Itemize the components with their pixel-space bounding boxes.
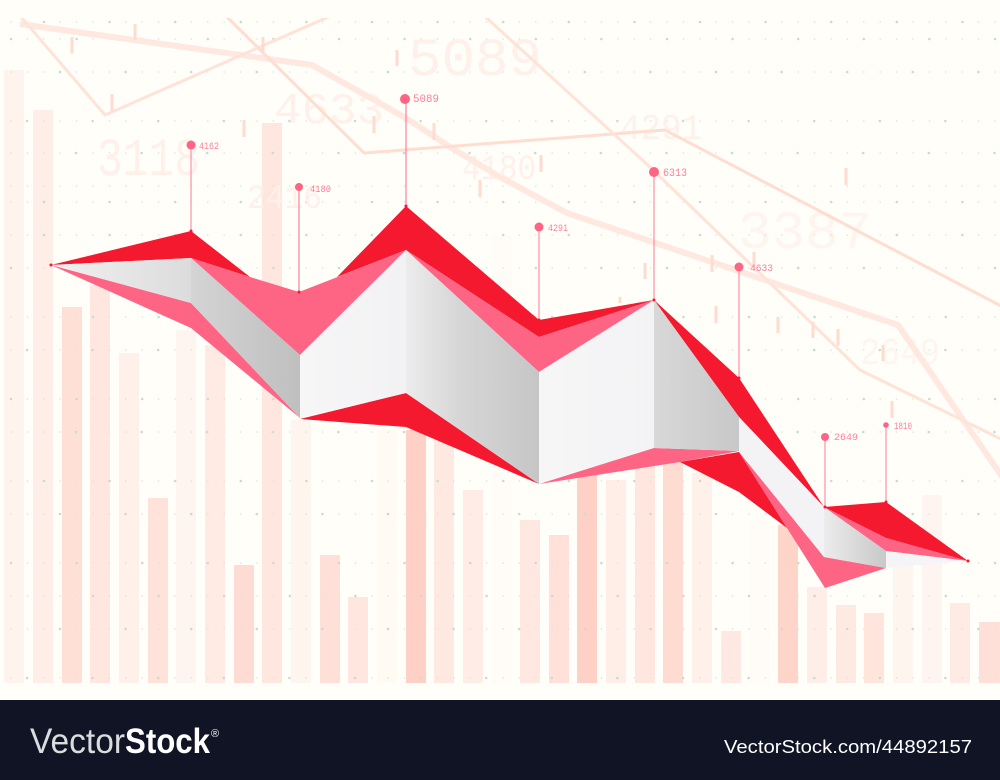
ribbon panels xyxy=(51,250,968,568)
data pin: 1810 xyxy=(883,422,912,504)
ghost numbers: 4291 xyxy=(620,109,702,150)
background bar chart xyxy=(4,70,1000,683)
ghost numbers: 2416 xyxy=(247,181,322,219)
data pin: 2649: 2649 xyxy=(834,433,858,444)
footer logo: Vector xyxy=(30,722,125,761)
footer logo xyxy=(30,722,219,761)
data pin: 6313 xyxy=(649,167,687,302)
red lower fold, centre xyxy=(300,393,539,484)
data pin: 5089 xyxy=(400,94,439,208)
pink upper fold, centre xyxy=(406,250,654,372)
data pin: 4633 xyxy=(734,262,773,380)
data pin: 4633: 4633 xyxy=(750,263,773,275)
data pin: 1810: 1810 xyxy=(894,422,912,433)
red upper fold, far right xyxy=(824,502,968,561)
red upper fold, centre xyxy=(337,206,654,337)
red upper fold, right xyxy=(654,300,824,507)
red upper fold, left xyxy=(51,231,250,277)
background trend lines xyxy=(15,10,1000,478)
red lower fold, right xyxy=(680,452,787,528)
data pin: 2649 xyxy=(821,433,858,508)
ghost numbers: 2649 xyxy=(860,333,940,376)
pink lower fold, centre xyxy=(539,448,739,484)
data pin: 5089: 5089 xyxy=(413,94,439,106)
ghost numbers: 4180 xyxy=(462,150,536,190)
pink upper fold, far right xyxy=(824,507,968,561)
footer logo: ® xyxy=(211,728,219,740)
data pin: 4162 xyxy=(186,140,219,232)
ghost numbers xyxy=(97,31,940,376)
footer image id: VectorStock.com/44892157 xyxy=(724,737,972,757)
ribbon end points xyxy=(50,264,970,562)
ghost numbers: 3118 xyxy=(97,131,200,192)
data pin: 4291: 4291 xyxy=(548,224,568,235)
ghost numbers: 4633 xyxy=(274,87,384,137)
folded ribbon chart xyxy=(51,206,968,588)
footer bar xyxy=(0,700,1000,780)
data pin: 4180: 4180 xyxy=(310,185,331,196)
data pin: 4291 xyxy=(534,222,568,322)
data pin: 4180 xyxy=(295,183,331,294)
data pin: 4162: 4162 xyxy=(199,142,219,153)
data pin: 6313: 6313 xyxy=(663,168,687,180)
background tick marks xyxy=(72,24,892,418)
ghost numbers: 3387 xyxy=(738,204,872,265)
ghost numbers: 5089 xyxy=(408,31,542,92)
pink upper fold, left xyxy=(191,250,406,355)
footer logo: Stock xyxy=(125,722,210,761)
pink lower fold, left xyxy=(51,265,300,418)
pink lower fold, right xyxy=(739,452,886,588)
